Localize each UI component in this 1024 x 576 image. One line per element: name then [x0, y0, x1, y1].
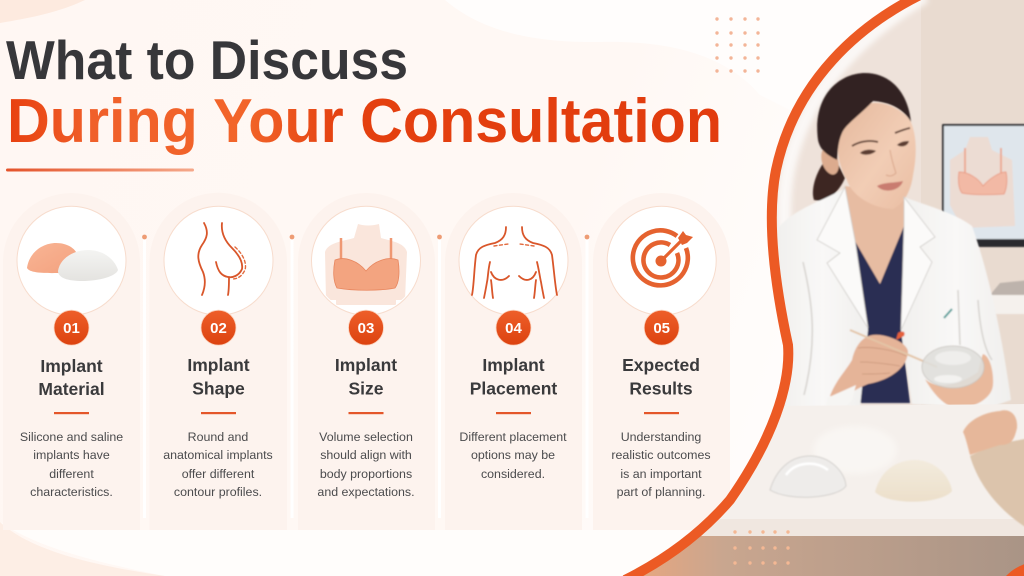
description: body proportions: [320, 467, 412, 481]
description: characteristics.: [30, 485, 113, 499]
client arm and hands: [963, 410, 1024, 530]
number badge 05: [644, 310, 679, 345]
description: Volume selection: [319, 430, 413, 444]
description: Silicone and saline: [20, 430, 123, 444]
lapels: [817, 187, 868, 328]
number badge 03: [348, 310, 384, 345]
description: anatomical implants: [163, 448, 273, 462]
face: [838, 103, 916, 209]
description: considered.: [481, 467, 545, 481]
coat: [778, 188, 868, 408]
icon: bra on torso: [312, 206, 420, 315]
description: contour profiles.: [174, 485, 262, 499]
number badge 01: 01: [63, 320, 80, 337]
accent rule: [348, 412, 384, 414]
doctor: [778, 73, 1011, 414]
description: implants have: [33, 448, 110, 462]
monitor: [942, 124, 1024, 247]
separators between cards: [142, 235, 589, 518]
right hand: [925, 354, 993, 408]
icon: implant domes: [17, 206, 126, 315]
hair: [817, 73, 911, 160]
photo: consultation scene: [620, 0, 1024, 576]
icon: torso outline: [459, 206, 568, 315]
panel: implant placement: [445, 193, 582, 530]
heading: Implant: [40, 356, 103, 376]
accent rule: [496, 412, 531, 414]
heading: Implant: [335, 355, 397, 375]
accent rule: [54, 412, 89, 414]
description: Understanding: [621, 430, 701, 444]
ponytail: [813, 160, 845, 201]
clear implant on table: [770, 456, 846, 497]
number badge 03: 03: [358, 320, 374, 337]
heading: Results: [629, 378, 693, 398]
description: Round and: [188, 430, 248, 444]
orange curved border: [625, 0, 920, 576]
left hand with pen: [830, 335, 908, 400]
description: should align with: [320, 448, 412, 462]
held implant: [922, 346, 984, 388]
number badge 04: [496, 310, 531, 345]
table: [620, 404, 1024, 576]
description: different: [49, 467, 94, 481]
panel: expected results: [593, 193, 730, 530]
heading: Material: [38, 379, 105, 399]
description: and expectations.: [317, 485, 415, 499]
heading: Shape: [192, 378, 245, 398]
number badge 04: 04: [505, 320, 522, 337]
title: During Your Consultation: [7, 87, 722, 156]
heading: Implant: [482, 355, 545, 375]
description: is an important: [620, 467, 702, 481]
number badge 01: [54, 310, 89, 345]
corner accent: [1006, 564, 1024, 576]
panel: implant size: [311, 206, 421, 498]
description: offer different: [182, 467, 255, 481]
panel: implant shape: [150, 193, 287, 530]
bottom dot grid: [733, 530, 790, 565]
description: Different placement: [459, 430, 567, 444]
coat folds: [803, 262, 992, 395]
neck: [845, 186, 904, 284]
number badge 02: 02: [210, 320, 227, 337]
shelf: [990, 280, 1024, 314]
ear: [820, 149, 840, 176]
title: What to Discuss: [6, 29, 408, 91]
accent rule: [201, 412, 236, 414]
pocket pen: [944, 309, 952, 318]
title underline: [6, 168, 194, 172]
eyes, brows, lips: [852, 128, 910, 146]
scrubs: [852, 226, 910, 403]
heading: Expected: [622, 355, 700, 375]
heading: Size: [348, 378, 384, 398]
title: [6, 29, 722, 156]
panel: implant material: [3, 193, 140, 530]
number badge 05: 05: [653, 320, 670, 337]
accent rule: [644, 412, 679, 414]
wall: [777, 0, 1024, 406]
description: realistic outcomes: [611, 448, 711, 462]
description: options may be: [471, 448, 555, 462]
number badge 02: [201, 310, 236, 345]
icon: body profile: [164, 206, 273, 315]
heading: Implant: [187, 355, 250, 375]
beige implant on table: [875, 460, 952, 502]
description: part of planning.: [617, 485, 705, 499]
decorative dot grid, top: [715, 17, 760, 73]
icon: target with arrow: [607, 206, 716, 315]
heading: Placement: [470, 378, 557, 398]
